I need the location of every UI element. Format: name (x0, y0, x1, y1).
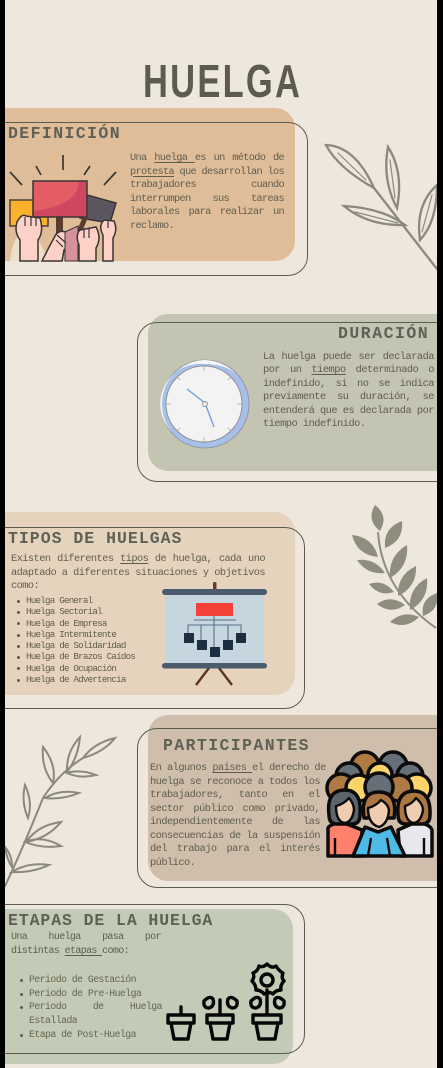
black side bar right (437, 0, 443, 1068)
text: duración: tiempo indefinido. (263, 418, 366, 430)
list: tipos de huelga: Huelga de Solidaridad (26, 640, 126, 651)
list: tipos de huelga: Huelga de Advertencia (26, 674, 126, 685)
text: definición: trabajadores cuando (130, 179, 284, 191)
text: duración: por un tiempo determinado o (263, 364, 434, 376)
list: tipos de huelga (17, 595, 136, 685)
text: duración: previamente su duración, se (263, 391, 434, 403)
text: tipos intro: adaptado a diferentes situaciones y objetivos (11, 566, 265, 578)
text: participantes: del trabajo para el interés (150, 843, 320, 855)
heading: duración: DURACIÓN (338, 324, 429, 343)
text: duración: entenderá que es declarada por (263, 405, 434, 417)
heading: etapas de la huelga: ETAPAS DE LA HUELGA (8, 911, 213, 930)
text: definición (130, 152, 284, 232)
text: participantes: público. (150, 856, 195, 868)
list: tipos de huelga: Huelga de Ocupación (26, 663, 116, 674)
list: tipos de huelga: Huelga de Empresa (26, 618, 107, 629)
text: definición: interrumpen sus tareas (130, 193, 284, 205)
text: participantes (150, 762, 326, 868)
heading: participantes: PARTICIPANTES (163, 736, 310, 755)
icon: presentation board with org chart (162, 582, 267, 686)
list: tipos de huelga: Huelga de Brazos Caídos (26, 651, 135, 662)
list: etapas: Periodo de Pre-Huelga (29, 988, 141, 999)
text: participantes: huelga se reconoce a todos los (150, 776, 320, 788)
text: participantes: En algunos países el derecho de (150, 762, 326, 774)
panel: participantes (137, 715, 437, 888)
text: definición: laborales para realizar un (130, 206, 284, 218)
list: tipos de huelga: Huelga Sectorial (26, 606, 102, 617)
text: duración: indefinido, si no se indica (263, 378, 434, 390)
list: tipos de huelga: Huelga Intermitente (26, 629, 116, 640)
panel: tipos de huelgas (5, 512, 305, 709)
list: etapas: Etapa de Post-Huelga (29, 1029, 136, 1040)
icon: clock (160, 360, 250, 448)
text: definición: Una huelga es un método de (130, 152, 284, 164)
title: HUELGA (143, 55, 302, 107)
panel: duración (137, 314, 437, 482)
list: tipos de huelga: Huelga General (26, 595, 92, 606)
text: definición: protesta que desarrollan los (130, 166, 284, 178)
decoration: filled laurel branch right (352, 505, 437, 629)
list: etapas: Periodo de Huelga (29, 1001, 162, 1012)
text: participantes: consecuencias de la suspensión (150, 830, 320, 842)
icon: protest signs and fists (9, 155, 117, 262)
list: etapas: Periodo de Gestación (29, 974, 136, 985)
text: definición: reclamo. (130, 220, 174, 232)
text: duración: La huelga puede ser declarada (263, 351, 434, 363)
panel: etapas de la huelga (5, 904, 305, 1064)
text: participantes: sector público como privado, (150, 802, 320, 814)
text: etapas intro: Una huelga pasa por (11, 932, 161, 943)
list: etapas (20, 974, 162, 1040)
text: etapas intro: distintas etapas como: (11, 946, 129, 957)
text: tipos intro: Existen diferentes tipos de huelga, cada uno (11, 553, 265, 565)
text: duración (263, 351, 434, 430)
text: etapas intro (11, 932, 161, 957)
icon: growing plants in pots (166, 962, 286, 1041)
text: participantes: independientemente de las (150, 816, 320, 828)
heading: definición: DEFINICIÓN (8, 124, 121, 143)
text: tipos intro: como: (11, 580, 39, 592)
decoration: outlined branch bottom left (5, 734, 118, 887)
decoration: outlined branch top right (324, 144, 437, 270)
icon: group of workers (325, 750, 434, 858)
heading: tipos de huelgas: TIPOS DE HUELGAS (8, 529, 182, 548)
black side bar left (0, 0, 5, 1068)
panel: definición (5, 108, 308, 276)
text: participantes: trabajadores, tanto en el (150, 789, 320, 801)
text: tipos intro (11, 553, 265, 592)
list: etapas: Estallada (29, 1015, 77, 1026)
